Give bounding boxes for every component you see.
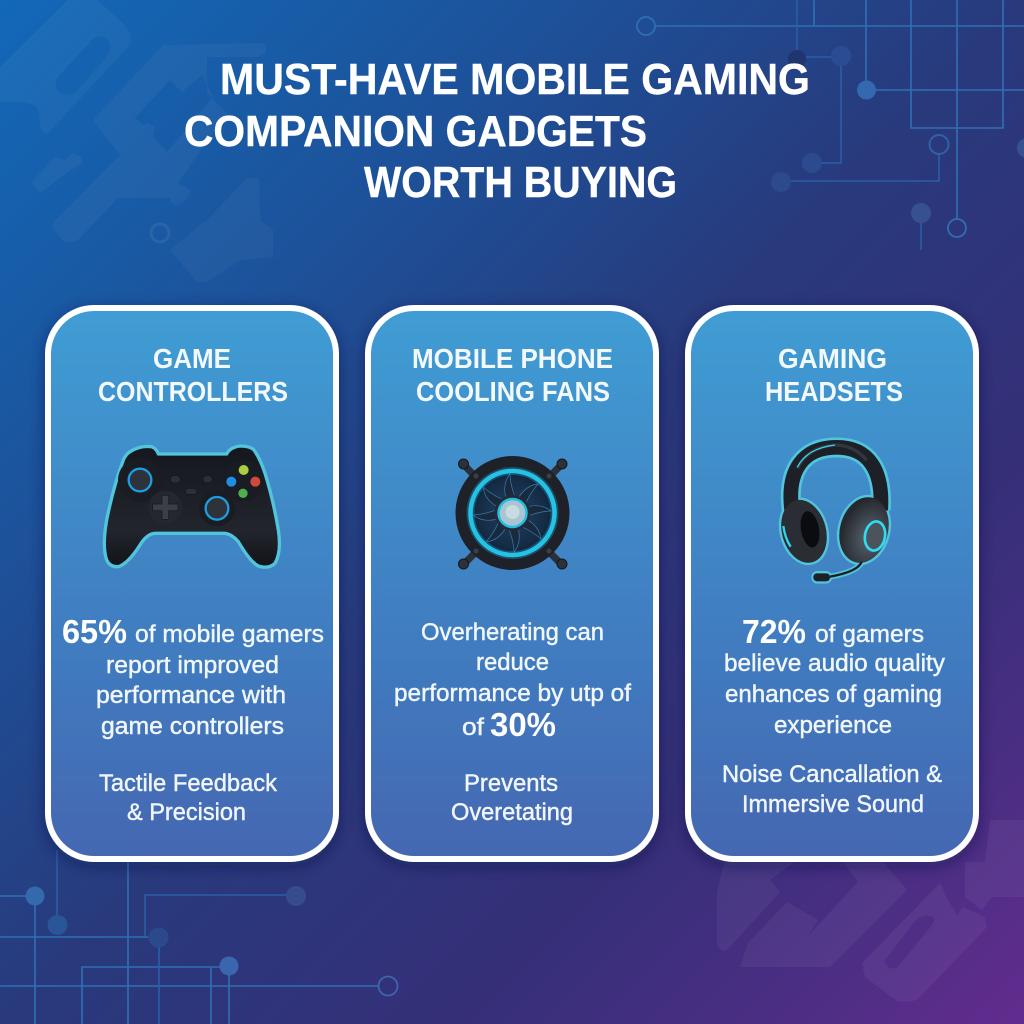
benefit text — [99, 770, 278, 826]
title: MUST-HAVE MOBILE GAMING — [220, 55, 810, 104]
card background — [688, 308, 976, 859]
benefit text: Immersive Sound — [742, 791, 924, 818]
background ghost controller shapes top-left — [0, 0, 273, 282]
heading: gaming headsets: HEADSETS — [765, 376, 903, 407]
stat text: 72%: experience — [774, 712, 892, 739]
heading: gaming headsets — [765, 343, 903, 407]
benefit text: & Precision — [127, 799, 246, 826]
heading: game controllers: GAME — [153, 343, 231, 374]
benefit text: Noise Cancallation & — [722, 761, 942, 788]
stat text: 72% — [724, 613, 945, 739]
stat text: 65%: 65% — [62, 613, 127, 650]
panel: gaming headsets — [688, 308, 976, 859]
panel: mobile phone cooling fans — [368, 308, 656, 859]
panel: game controllers — [48, 308, 336, 859]
heading: game controllers — [98, 343, 288, 407]
icon: gaming headset — [774, 445, 896, 584]
heading: cooling fans: MOBILE PHONE — [412, 343, 613, 374]
icon: cooling fan — [456, 456, 570, 570]
benefit text — [722, 761, 942, 818]
heading: game controllers: CONTROLLERS — [98, 376, 288, 407]
stat text: 30%: 30% — [490, 706, 556, 743]
icon: game controller — [104, 446, 279, 567]
benefit text: Tactile Feedback — [99, 770, 278, 797]
stat text: 72%: 72% — [742, 613, 806, 650]
circuit lines bottom-left — [0, 850, 398, 1024]
stat text: 30%: Overherating can — [421, 619, 604, 646]
stat text: 72%: enhances of gaming — [725, 681, 942, 708]
stat text: 30%: reduce — [476, 649, 549, 676]
stat text: 30%: of — [462, 714, 484, 741]
heading: cooling fans — [412, 343, 613, 407]
background ghost ring top-left — [151, 224, 169, 242]
stat text: 72%: believe audio quality — [724, 650, 945, 677]
card background — [48, 308, 336, 859]
stat text: 30% — [394, 619, 631, 743]
circuit lines top-right — [637, 0, 1024, 250]
heading: cooling fans: COOLING FANS — [416, 376, 610, 407]
stat text: 65%: performance with — [96, 682, 286, 709]
stat text: 65%: report improved — [106, 652, 279, 679]
card background — [368, 308, 656, 859]
title — [184, 55, 810, 207]
benefit text: Prevents — [464, 770, 558, 797]
stat text: 65% — [62, 613, 324, 740]
title: COMPANION GADGETS — [184, 107, 647, 156]
benefit text: Overetating — [451, 799, 573, 826]
stat text: 65%: of mobile gamers — [135, 621, 324, 648]
background ghost controller shapes bottom-right — [717, 820, 1024, 1002]
stat text: 72%: of gamers — [815, 621, 924, 648]
stat text: 30%: performance by utp of — [394, 680, 631, 707]
heading: gaming headsets: GAMING — [778, 343, 887, 374]
title: WORTH BUYING — [364, 158, 677, 207]
stat text: 65%: game controllers — [101, 713, 284, 740]
benefit text — [451, 770, 573, 826]
